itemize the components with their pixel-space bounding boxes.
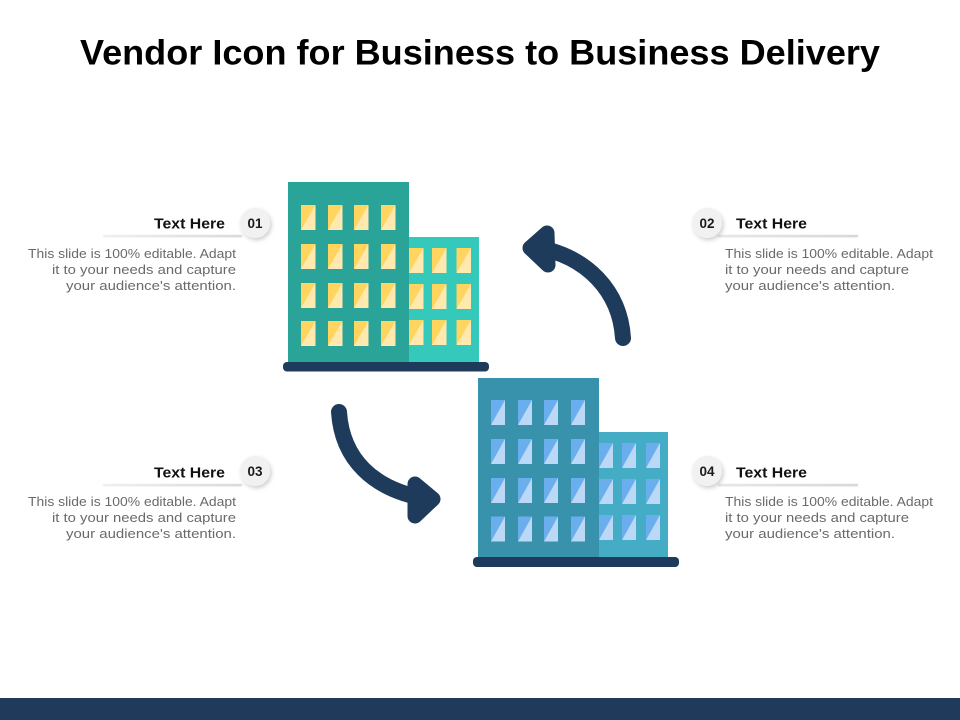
body text 01: your audience's attention. <box>66 278 236 293</box>
icon: blue office building <box>473 378 679 567</box>
body text 02 <box>725 246 933 293</box>
body text 03: This slide is 100% editable. Adapt <box>28 494 236 509</box>
body text 04: it to your needs and capture <box>725 510 909 525</box>
body text 03: your audience's attention. <box>66 526 236 541</box>
number badge 04: 04 <box>699 464 715 479</box>
heading 03: Text Here <box>154 464 225 482</box>
body text 04: This slide is 100% editable. Adapt <box>725 494 933 509</box>
body text 04 <box>725 494 933 541</box>
icon: teal office building <box>283 182 489 372</box>
panel: text block 02 <box>692 208 933 293</box>
body text 01: This slide is 100% editable. Adapt <box>28 246 236 261</box>
body text 02: This slide is 100% editable. Adapt <box>725 246 933 261</box>
body text 04: your audience's attention. <box>725 526 895 541</box>
number badge 03 <box>240 456 270 486</box>
title: Vendor Icon for Business to Business Delivery <box>80 32 880 72</box>
footer bar <box>0 698 960 720</box>
number badge 02 <box>692 208 722 238</box>
panel: text block 03 <box>28 456 270 541</box>
number badge 02: 02 <box>699 216 715 231</box>
number badge 04 <box>692 456 722 486</box>
panel: text block 01 <box>28 208 270 293</box>
heading 02: Text Here <box>736 216 807 232</box>
panel: text block 04 <box>692 456 933 541</box>
body text 03: it to your needs and capture <box>52 510 236 525</box>
number badge 01: 01 <box>247 216 263 231</box>
number badge 01 <box>240 208 270 238</box>
body text 02: it to your needs and capture <box>725 262 909 277</box>
body text 01: it to your needs and capture <box>52 262 236 277</box>
body text 02: your audience's attention. <box>725 278 895 293</box>
heading 04: Text Here <box>736 464 807 482</box>
body text 01 <box>28 246 236 293</box>
number badge 03: 03 <box>247 464 263 479</box>
arrow: curved down-right <box>339 412 433 516</box>
body text 03 <box>28 494 236 541</box>
arrow: curved up-left <box>530 233 623 338</box>
heading 01: Text Here <box>154 216 225 232</box>
